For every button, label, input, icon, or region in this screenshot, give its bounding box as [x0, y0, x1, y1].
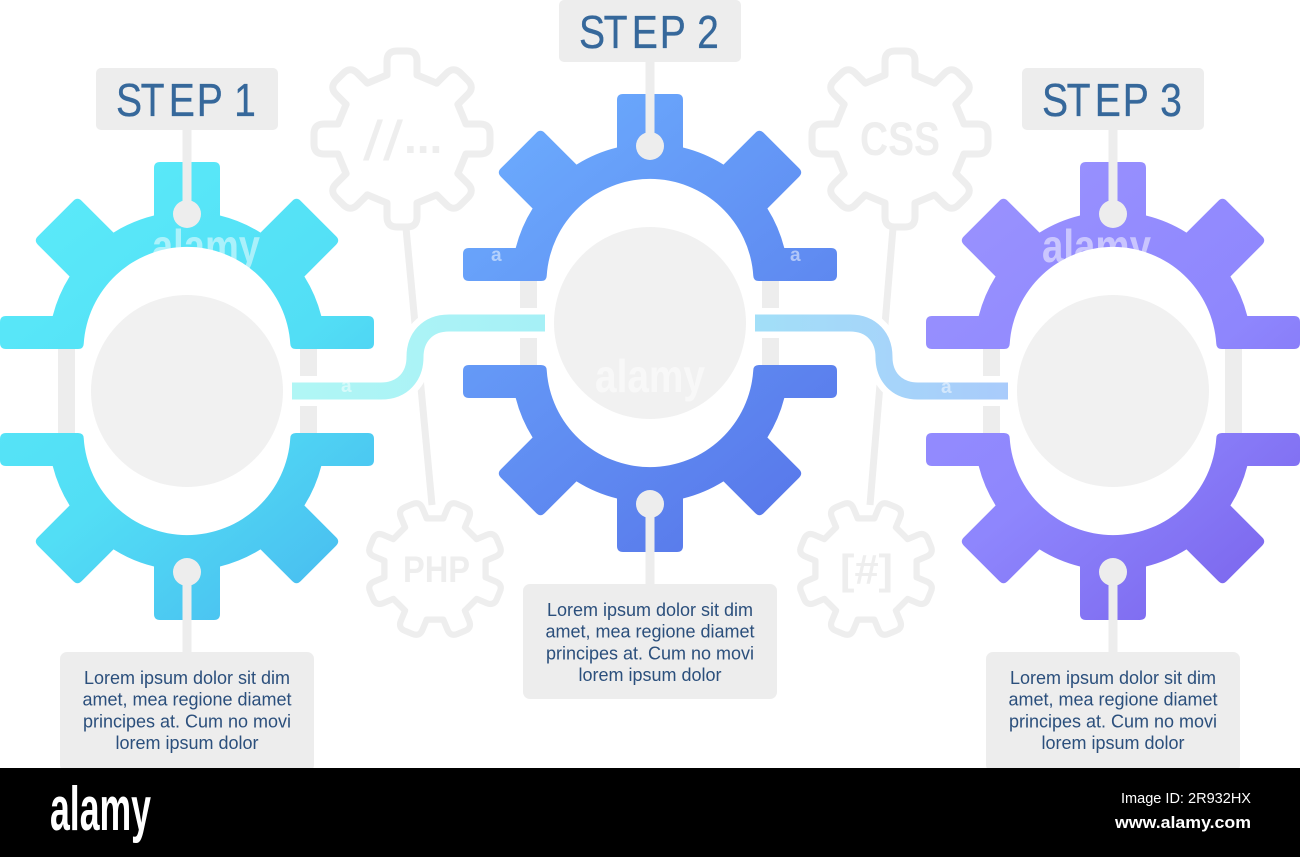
watermarks: alamy: [1042, 220, 1151, 272]
ghost gear: hash: [#]: [840, 546, 893, 593]
text block: step 3: amet, mea regione diamet: [1008, 690, 1218, 710]
text block: step 1: [60, 558, 314, 772]
label: step 3: [1022, 68, 1204, 228]
text block: step 3: principes at. Cum no movi: [1009, 711, 1217, 731]
text block: step 2: principes at. Cum no movi: [546, 643, 754, 663]
watermarks: a: [491, 245, 502, 266]
ghost gear: comment: [314, 51, 490, 505]
label: step 1: [96, 68, 278, 228]
side bars 2: [520, 281, 779, 365]
ghost gear: hash: [776, 479, 956, 659]
watermarks: a: [941, 377, 952, 398]
text block: step 1: amet, mea regione diamet: [82, 690, 292, 710]
side bars 1: [58, 349, 317, 433]
footer image id: Image ID: 2R932HX: [1121, 790, 1251, 807]
panel: step 1 gear: [0, 162, 374, 620]
center circle 1: [91, 295, 283, 487]
ghost gear: CSS: CSS: [860, 112, 940, 165]
ghost gear: CSS: [812, 51, 988, 505]
gear body 3: [926, 162, 1300, 620]
text block: step 2: [523, 490, 777, 699]
watermarks: alamy: [595, 350, 705, 402]
footer logo: alamy: [50, 775, 151, 844]
ghost gear: comment: //: [363, 109, 404, 172]
watermarks: alamy: [152, 220, 260, 272]
text block: step 1: lorem ipsum dolor: [115, 733, 259, 753]
watermarks: a: [341, 376, 352, 397]
text block: step 2: lorem ipsum dolor: [578, 665, 722, 685]
ghost gear: PHP: [345, 479, 525, 659]
text block: step 2: amet, mea regione diamet: [545, 622, 755, 642]
label: step 1: STEP 1: [116, 75, 256, 127]
center circle 3: [1017, 295, 1209, 487]
connector: step 1 to step 2: [292, 323, 545, 391]
text block: step 3: [986, 558, 1240, 772]
label: step 3: STEP 3: [1042, 75, 1182, 127]
label: step 2: [559, 0, 741, 160]
ghost gear: comment: ...: [404, 111, 442, 163]
connector: step 2 to step 3: [755, 323, 1008, 391]
text block: step 2: Lorem ipsum dolor sit dim: [547, 600, 753, 620]
watermarks: [152, 220, 1151, 402]
panel: step 3 gear: [926, 162, 1300, 620]
gear body 2: [463, 94, 837, 552]
side bars 3: [983, 349, 1242, 433]
text block: step 3: Lorem ipsum dolor sit dim: [1010, 668, 1216, 688]
gear body 1: [0, 162, 374, 620]
watermarks: a: [790, 245, 801, 266]
label: step 2: STEP 2: [579, 7, 719, 59]
center circle 2: [554, 227, 746, 419]
text block: step 1: principes at. Cum no movi: [83, 711, 291, 731]
footer bar: [0, 768, 1300, 857]
ghost gear: PHP: PHP: [403, 549, 470, 590]
text block: step 3: lorem ipsum dolor: [1041, 733, 1185, 753]
panel: step 2 gear: [463, 94, 837, 552]
footer url: www.alamy.com: [1114, 814, 1251, 832]
text block: step 1: Lorem ipsum dolor sit dim: [84, 668, 290, 688]
